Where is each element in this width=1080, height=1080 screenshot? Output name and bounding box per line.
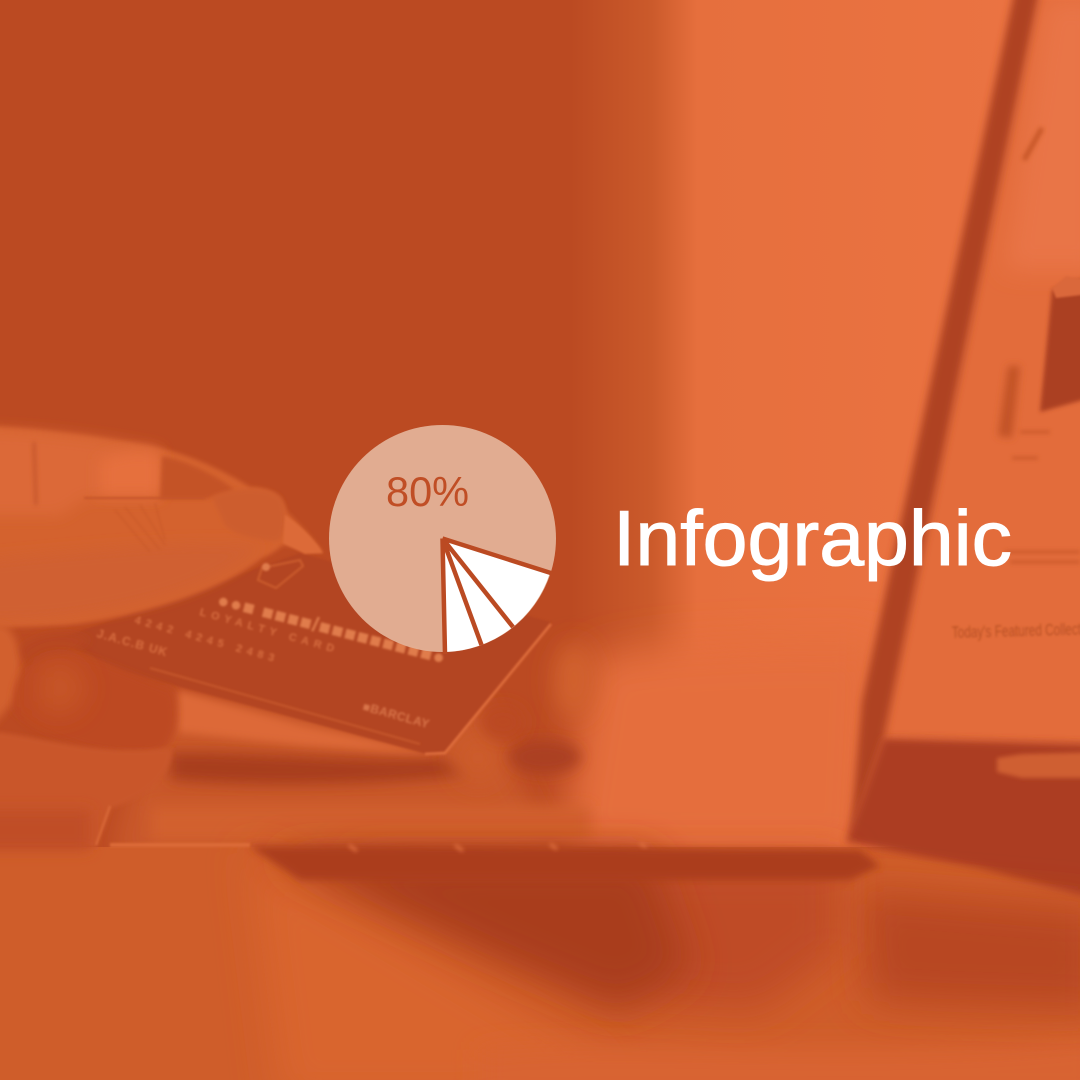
- large 80% segment: [329, 425, 556, 652]
- laptop base: [846, 738, 1080, 900]
- credit card: LOYALTY CARD: [198, 606, 340, 656]
- pie label: 80%: 80%: [386, 468, 469, 515]
- finger mass: [0, 426, 323, 628]
- table: [0, 847, 1080, 1080]
- desk area beneath the card: [110, 642, 594, 860]
- credit card: J.A.C.B UK: [95, 626, 170, 659]
- segment dividers: [442, 538, 552, 654]
- hand: [0, 426, 323, 850]
- laptop bezel edge: [850, 0, 1042, 838]
- index finger shading: [0, 544, 262, 622]
- laptop logos strip: [997, 752, 1080, 778]
- shadowed gap behind index finger: [160, 456, 235, 499]
- edge of palm at left: [0, 628, 22, 718]
- palm below thumb: [0, 730, 172, 848]
- card number blocks: ●●■ ■■■■/■■■■■■■■■●: [215, 590, 448, 670]
- pie chart: [329, 425, 556, 654]
- white segments: [442, 538, 550, 652]
- lower thumb: [14, 682, 178, 748]
- credit card: [55, 553, 551, 755]
- back finger highlight: [0, 435, 136, 510]
- keyboard and shadow: [110, 843, 1080, 1010]
- fingernail: [212, 489, 285, 541]
- credit card: ■BARCLAY: [361, 699, 431, 731]
- credit card: 4242 4245 2483: [133, 614, 280, 666]
- card chip: [258, 560, 303, 588]
- wall behind laptop: [560, 0, 1080, 860]
- title: Infographic: [613, 494, 1012, 582]
- laptop screen: [950, 126, 1080, 738]
- knuckle wrinkles: [115, 503, 165, 552]
